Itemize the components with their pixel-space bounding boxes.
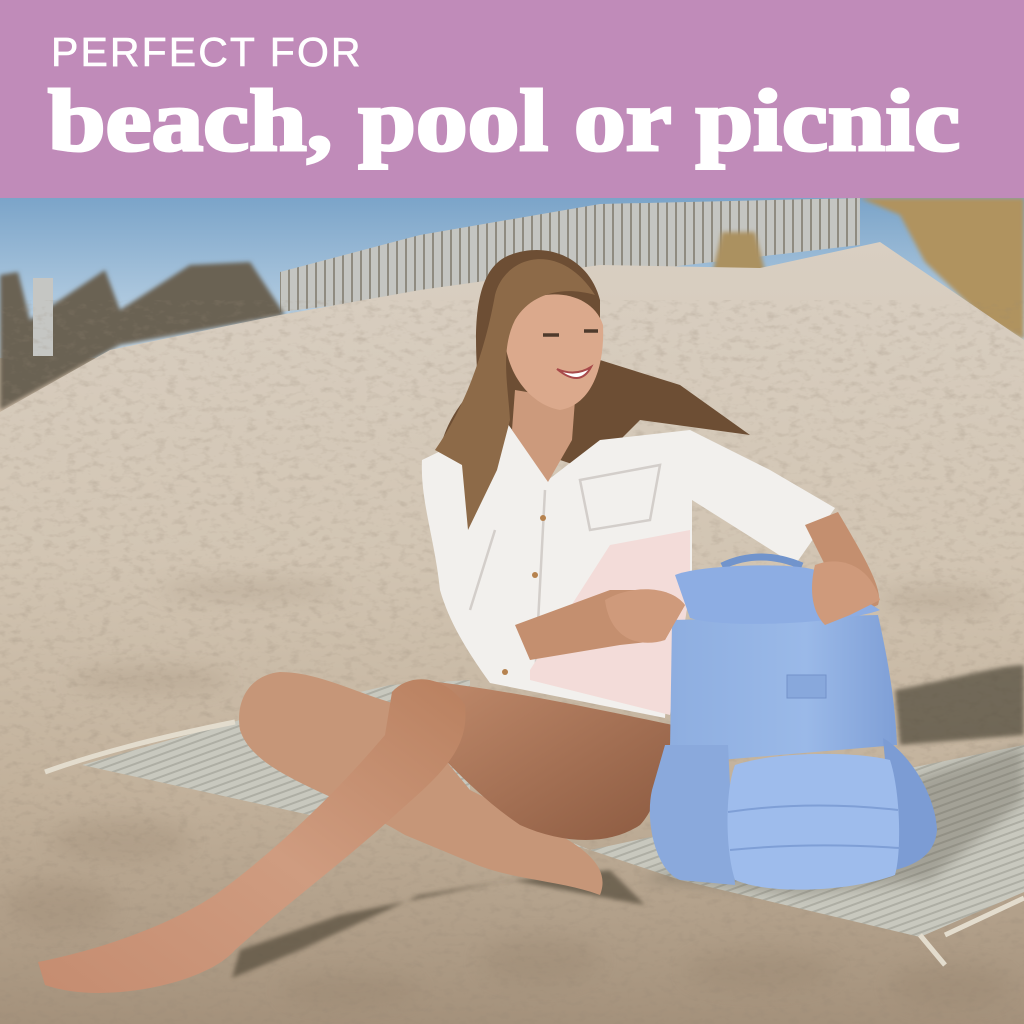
dry dune grass: [702, 198, 1024, 340]
sand: [0, 242, 1024, 1024]
forearm: [515, 590, 685, 660]
side pockets: [650, 745, 735, 885]
far leg: [239, 672, 603, 895]
dune fence: [0, 198, 860, 410]
sand footprints: [5, 580, 1010, 1007]
main heading: beach, pool or picnic: [48, 73, 960, 170]
back hair: [438, 250, 750, 490]
arm on bag: [805, 512, 879, 625]
shirt pink tint: [530, 530, 690, 715]
handle: [722, 557, 802, 566]
leg shadow: [232, 870, 645, 978]
banner: [0, 0, 1024, 198]
hand on bag: [812, 561, 880, 625]
eyes: [543, 331, 598, 335]
front quilted pocket: [728, 754, 899, 890]
subheading: PERFECT FOR: [51, 29, 363, 75]
logo patch: [787, 675, 826, 698]
thigh: [420, 680, 673, 840]
blanket shadow: [640, 745, 1024, 895]
neck: [512, 390, 575, 482]
woman: [38, 250, 879, 993]
blanket fringe: [45, 722, 1024, 965]
sky: [0, 198, 1024, 358]
smile: [557, 367, 591, 378]
cooler backpack: [650, 557, 937, 890]
lid: [675, 565, 880, 624]
shirt folds: [470, 465, 660, 680]
blanket: [82, 680, 1024, 937]
hand holding zipper: [605, 589, 685, 643]
sand texture: [0, 300, 1024, 1024]
near leg: [38, 679, 466, 993]
bag shadow on sand: [895, 665, 1024, 745]
shirt buttons: [502, 515, 546, 675]
front hair: [435, 259, 595, 530]
shirt: [422, 420, 835, 718]
face: [504, 294, 603, 410]
backpack body: [670, 615, 897, 760]
